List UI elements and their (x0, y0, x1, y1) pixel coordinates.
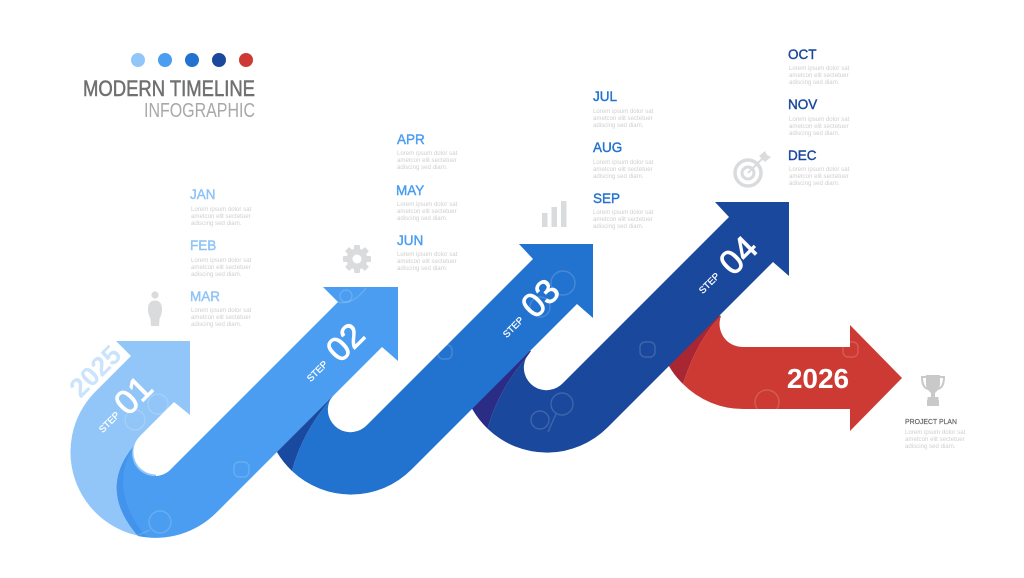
text block: project plan: PROJECT PLAN (905, 417, 957, 426)
icon: trophy (922, 375, 944, 406)
text block: SEP (593, 191, 654, 230)
text block: JAN: Lorem ipsum dolor sat (191, 206, 252, 213)
text block: AUG: AUG (593, 140, 622, 155)
text block: MAR: adiscing sed diam. (191, 321, 242, 328)
text block: APR: ametcon elit sectetuer (397, 157, 457, 164)
text block: JAN (190, 187, 252, 227)
text block: JUL: Lorem ipsum dolor sat (593, 108, 654, 115)
arrow step 04 (461, 202, 789, 453)
arrow step 03: STEP (501, 315, 526, 340)
text block: MAY: MAY (396, 183, 424, 198)
year label 2025: 2025 (64, 340, 127, 403)
text block: NOV: adiscing sed diam. (789, 130, 840, 137)
text block: DEC (788, 148, 850, 187)
watermark marks (125, 271, 858, 536)
text block: MAR (190, 289, 252, 328)
text block: AUG: adiscing sed diam. (593, 173, 644, 180)
icon: gear (343, 245, 371, 273)
text block: MAR: ametcon elit sectetuer (191, 314, 251, 321)
text block: JAN: ametcon elit sectetuer (191, 213, 251, 220)
text block: JUN (397, 233, 458, 272)
text block: JUN: adiscing sed diam. (397, 265, 448, 272)
red arrow 2026: 2026 (787, 363, 849, 394)
text block: SEP: SEP (593, 191, 620, 206)
text block: JUN: ametcon elit sectetuer (397, 258, 457, 265)
text block: MAY: ametcon elit sectetuer (397, 208, 457, 215)
text block: JUN: JUN (397, 233, 423, 248)
text block: project plan: ametcon elit sectetuer (905, 436, 965, 443)
title: MODERN TIMELINE (83, 76, 255, 101)
text block: SEP: Lorem ipsum dolor sat (593, 209, 654, 216)
icon: person (148, 291, 162, 326)
text block: OCT: OCT (788, 47, 816, 62)
arrow step 02: STEP (305, 359, 330, 384)
text block: APR: Lorem ipsum dolor sat (397, 150, 458, 157)
text block: JAN: adiscing sed diam. (191, 220, 242, 227)
text block: JUN: Lorem ipsum dolor sat (397, 251, 458, 258)
icon: bar chart (542, 201, 566, 227)
text block: MAR: Lorem ipsum dolor sat (191, 307, 252, 314)
text block: MAR: MAR (190, 289, 220, 304)
text block: project plan: Lorem ipsum dolor sat (905, 429, 966, 436)
arrow step 03: 03 (514, 272, 568, 326)
text block: AUG: Lorem ipsum dolor sat (593, 159, 654, 166)
text block: AUG (593, 140, 654, 180)
title: INFOGRAPHIC (144, 100, 255, 122)
text block: MAY: Lorem ipsum dolor sat (397, 201, 458, 208)
text block: NOV (788, 97, 850, 137)
text block: FEB (190, 238, 252, 278)
text block: MAY (396, 183, 458, 222)
text block: AUG: ametcon elit sectetuer (593, 166, 653, 173)
icon: target (735, 151, 771, 186)
text block: JUL: ametcon elit sectetuer (593, 115, 653, 122)
arrow step 01: 01 (107, 369, 161, 423)
text block: DEC: adiscing sed diam. (789, 180, 840, 187)
text block: OCT: adiscing sed diam. (789, 79, 840, 86)
title (83, 76, 255, 122)
arrow step 01: STEP (97, 410, 122, 435)
text block: project plan: adiscing sed diam. (905, 443, 956, 450)
text block: DEC: Lorem ipsum dolor sat (789, 166, 850, 173)
text block: DEC: DEC (788, 148, 817, 163)
text block: OCT (788, 47, 850, 86)
text block: FEB: FEB (190, 238, 216, 253)
text block: NOV: Lorem ipsum dolor sat (789, 116, 850, 123)
arrow step 02 (117, 287, 398, 538)
text block: APR: adiscing sed diam. (397, 164, 448, 171)
text block: APR (397, 132, 458, 171)
text block: project plan (905, 417, 966, 450)
arrow step 04: STEP (697, 271, 722, 296)
text block: JUL (593, 89, 654, 129)
text block: JUL: JUL (593, 89, 617, 104)
text block: MAY: adiscing sed diam. (397, 215, 448, 222)
text block: OCT: Lorem ipsum dolor sat (789, 65, 850, 72)
text block: APR: APR (397, 132, 425, 147)
text block: DEC: ametcon elit sectetuer (789, 173, 849, 180)
red arrow 2026 (657, 295, 902, 431)
text block: NOV: NOV (788, 97, 817, 112)
text block: JAN: JAN (190, 187, 216, 202)
text block: NOV: ametcon elit sectetuer (789, 123, 849, 130)
text block: FEB: adiscing sed diam. (191, 271, 242, 278)
arrow step 03 (265, 244, 593, 495)
text block: FEB: Lorem ipsum dolor sat (191, 257, 252, 264)
text block: OCT: ametcon elit sectetuer (789, 72, 849, 79)
text block: SEP: ametcon elit sectetuer (593, 216, 653, 223)
text block: SEP: adiscing sed diam. (593, 223, 644, 230)
text block: JUL: adiscing sed diam. (593, 122, 644, 129)
arrow step 01 (70, 341, 190, 538)
arrow step 02: 02 (319, 316, 373, 370)
arrow step 04: 04 (712, 229, 766, 283)
text block: FEB: ametcon elit sectetuer (191, 264, 251, 271)
color dots legend (131, 53, 253, 67)
